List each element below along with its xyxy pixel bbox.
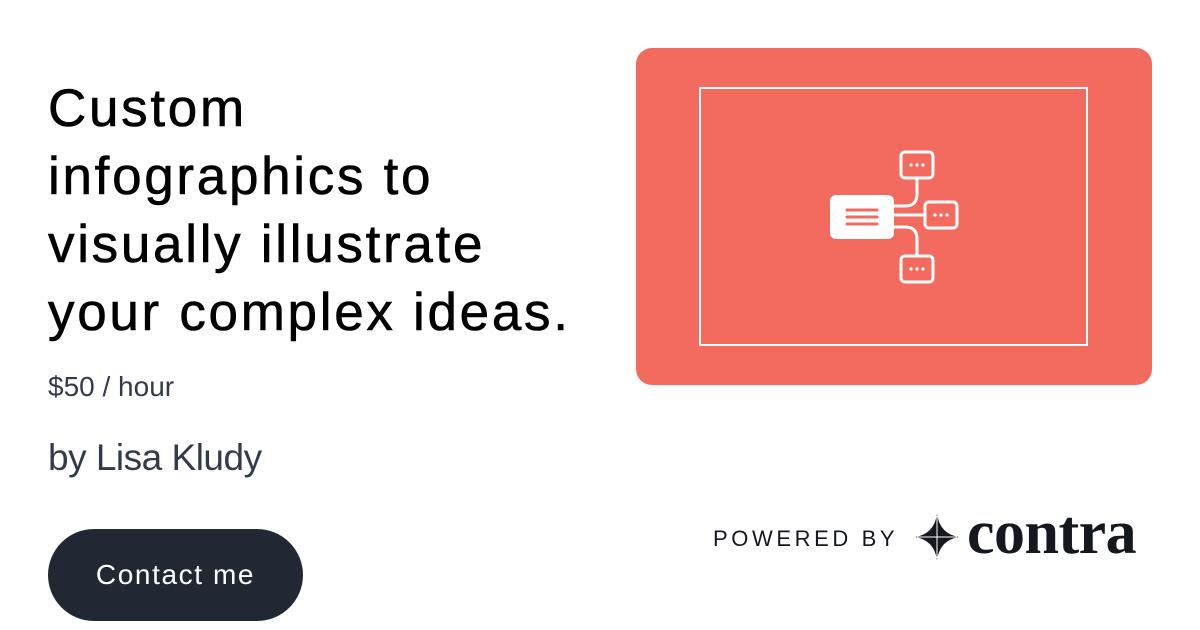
powered by: POWERED BY <box>713 526 898 551</box>
button: contact <box>48 529 303 621</box>
panel: illustration <box>636 48 1152 385</box>
icon: diagram <box>830 150 958 284</box>
frame <box>699 87 1088 346</box>
title: Custom <box>48 79 247 138</box>
author: by Lisa Kludy <box>48 437 262 478</box>
title: infographics to <box>48 147 433 206</box>
title: your complex ideas. <box>48 283 571 342</box>
title: visually illustrate <box>48 215 485 274</box>
logo: contra: contra <box>967 499 1136 567</box>
price: $50 / hour <box>48 371 174 402</box>
title <box>48 79 571 342</box>
button: contact: Contact me <box>96 559 255 590</box>
